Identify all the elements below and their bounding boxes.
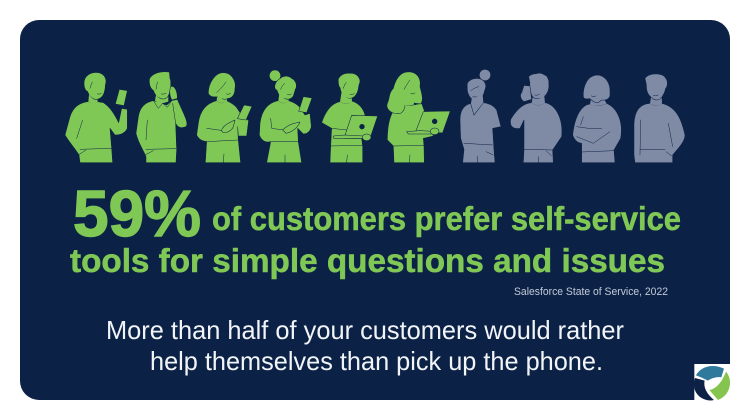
source citation: Salesforce State of Service, 2022 xyxy=(514,286,668,298)
person 2: man on a call xyxy=(136,72,187,163)
supporting statement: first line: More than half of your customers would rather xyxy=(106,315,624,345)
supporting statement: second line: help themselves than pick up the phone. xyxy=(150,346,603,376)
person 7: grey woman with hair bun xyxy=(460,69,501,163)
person 1: man with phone xyxy=(65,72,127,163)
person 3: woman with phone xyxy=(197,73,252,163)
headline: first line: of customers prefer self-service xyxy=(212,200,681,237)
person 10: grey man with hand in pocket xyxy=(634,74,685,163)
person 9: grey woman with crossed arms xyxy=(573,75,621,163)
headline: statistic: 59% xyxy=(73,177,201,250)
person 5: man with laptop xyxy=(322,73,378,163)
person 4: woman with hair bun and phone xyxy=(259,70,312,163)
person 6: woman with long hair and laptop xyxy=(387,72,450,163)
illustration: ten customers, six green and four grey xyxy=(65,69,685,163)
person 8: grey man on a call xyxy=(510,73,562,163)
headline: second line: tools for simple questions and issues xyxy=(70,242,665,279)
logo: white tile and tri-colour ring xyxy=(694,364,750,419)
